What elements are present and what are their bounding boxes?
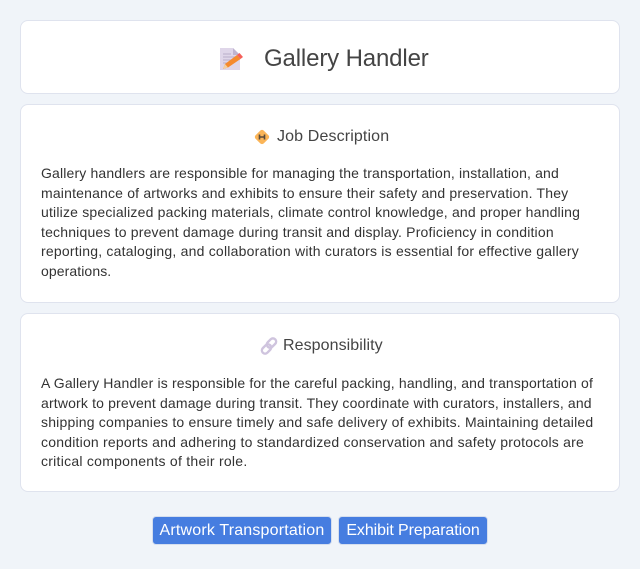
button: artwork transportation	[152, 516, 332, 545]
icon: road sign	[254, 130, 270, 144]
text block: responsibility: condition reports and adhering to standardized conservation and safety protocols are	[41, 434, 584, 450]
heading: responsibility: Responsibility	[283, 337, 383, 354]
text block: responsibility: A Gallery Handler is responsible for the careful packing, handling, and transportation of	[41, 375, 593, 391]
panel: title card	[20, 20, 620, 94]
text block: job description: maintenance of artworks and exhibits to ensure their safety and preservation. They	[41, 185, 568, 201]
text block: job description	[41, 165, 580, 279]
text block: job description: operations.	[41, 263, 111, 279]
icon: document with pencil	[220, 48, 243, 70]
title: Gallery Handler	[264, 45, 429, 72]
text block: job description: Gallery handlers are responsible for managing the transportation, installation, and	[41, 165, 559, 181]
panel: job description	[20, 104, 620, 303]
button: exhibit preparation	[338, 516, 488, 545]
text block: responsibility	[41, 375, 593, 469]
button: exhibit preparation: Exhibit Preparation	[346, 522, 480, 539]
text block: responsibility: artwork to prevent damage during transit. They coordinate with curators, installers, and	[41, 395, 592, 411]
text block: responsibility: critical components of their role.	[41, 453, 247, 469]
heading: job description: Job Description	[277, 128, 389, 145]
button: artwork transportation: Artwork Transportation	[160, 522, 324, 539]
panel: responsibility	[20, 313, 620, 492]
text block: job description: techniques to prevent damage during transit and display. Proficiency in condition	[41, 224, 554, 240]
text block: job description: reporting, cataloging, and collaboration with curators is essential for effective gallery	[41, 243, 579, 259]
icon: chain link	[260, 337, 278, 355]
text block: job description: utilize specialized packing materials, climate control knowledge, and proper handling	[41, 204, 580, 220]
text block: responsibility: shipping companies to ensure timely and safe delivery of exhibits. Maintaining detailed	[41, 414, 593, 430]
